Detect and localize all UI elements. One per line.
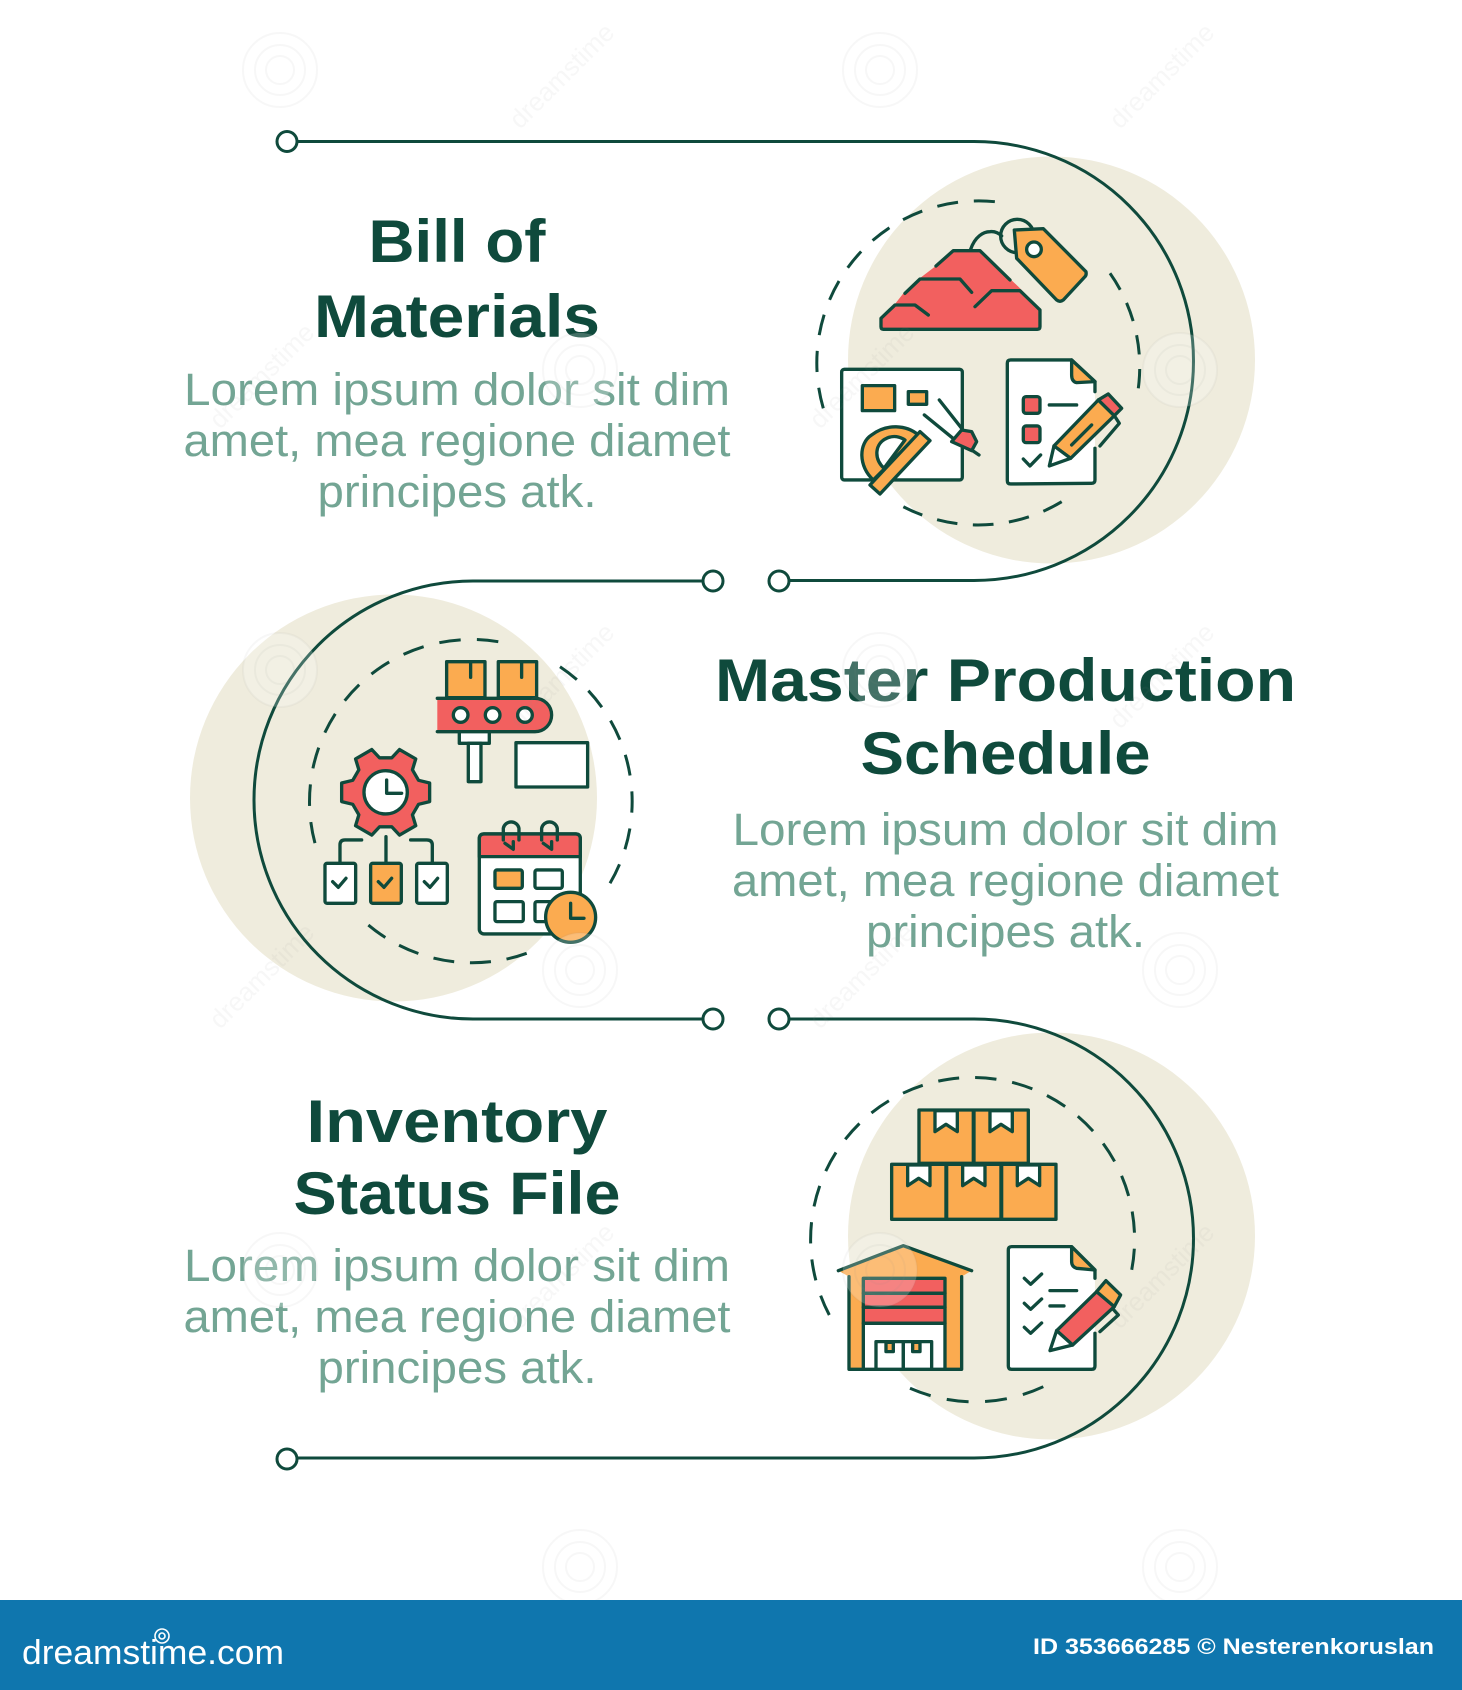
text block: inventory status file: Lorem ipsum dolor sit dim	[184, 1240, 730, 1291]
watermark: stock photo spirals and text: dreamstime	[503, 617, 620, 734]
text block: bill of materials: principes atk.	[318, 466, 596, 517]
text block: bill of materials: amet, mea regione diamet	[184, 415, 731, 466]
footer bar	[0, 1600, 1462, 1690]
text block: inventory status file: principes atk.	[318, 1342, 596, 1393]
panel: beige circle master production schedule	[190, 594, 597, 1002]
icon: raw materials pile with price tag	[881, 219, 1086, 329]
flow line: first segment	[277, 132, 1194, 591]
icon: calendar with clock	[479, 822, 596, 942]
footer logo text: dreamstime.com	[22, 1634, 284, 1672]
text block: bill of materials: Lorem ipsum dolor sit dim	[184, 364, 730, 415]
heading: bill of materials	[314, 208, 600, 350]
watermark: stock photo spirals and text: dreamstime	[803, 917, 920, 1034]
dashed ring: bill of materials	[817, 201, 1140, 525]
watermark: stock photo spirals and text: dreamstime	[203, 917, 320, 1034]
text block: bill of materials	[184, 364, 731, 517]
heading: master production schedule	[715, 647, 1296, 787]
watermark: stock photo spirals and text: dreamstime	[1103, 617, 1220, 734]
heading: bill of materials: Bill of	[368, 208, 547, 275]
icon: checklist document with pencil	[1007, 360, 1122, 484]
flow line: third segment	[277, 1009, 1194, 1469]
text block: master production schedule: principes atk.	[866, 906, 1145, 957]
icon: blueprint with protractor and compass	[842, 369, 979, 494]
heading: master production schedule: Master Production	[715, 647, 1296, 714]
icon: gear with clock and workflow boxes	[325, 750, 447, 903]
heading: master production schedule: Schedule	[860, 720, 1150, 787]
watermark: stock photo spirals and text: dreamstime	[1103, 17, 1220, 134]
text block: master production schedule: amet, mea regione diamet	[732, 855, 1280, 906]
footer logo spiral	[155, 1629, 169, 1643]
footer credit: ID 353666285 © Nesterenkoruslan	[1033, 1634, 1434, 1659]
text block: master production schedule	[732, 804, 1280, 957]
dashed ring: master production schedule	[310, 639, 632, 963]
watermark: stock photo spirals and text: dreamstime	[503, 1217, 620, 1334]
panel: beige circle inventory status file	[848, 1032, 1255, 1440]
text block: inventory status file: amet, mea regione diamet	[184, 1291, 731, 1342]
icon: conveyor belt with boxes	[437, 662, 588, 787]
flow line: second segment	[254, 571, 723, 1029]
heading: bill of materials: Materials	[314, 283, 600, 350]
heading: inventory status file: Inventory	[306, 1088, 608, 1155]
text block: master production schedule: Lorem ipsum dolor sit dim	[732, 804, 1278, 855]
watermark: stock photo spirals and text	[203, 17, 1220, 1604]
panel: beige circle bill of materials	[848, 156, 1255, 564]
icon: warehouse	[838, 1246, 972, 1369]
watermark: stock photo spirals and text: dreamstime	[803, 317, 920, 434]
dashed ring: inventory status file	[811, 1077, 1135, 1402]
watermark: stock photo spirals and text: dreamstime	[1103, 1217, 1220, 1334]
watermark: stock photo spirals and text: dreamstime	[203, 317, 320, 434]
text block: inventory status file	[184, 1240, 731, 1393]
icon: status checklist with pencil	[1008, 1247, 1121, 1369]
heading: inventory status file: Status File	[294, 1160, 620, 1227]
icon: stacked boxes	[892, 1110, 1056, 1219]
heading: inventory status file	[294, 1088, 620, 1227]
watermark: stock photo spirals and text: dreamstime	[503, 17, 620, 134]
